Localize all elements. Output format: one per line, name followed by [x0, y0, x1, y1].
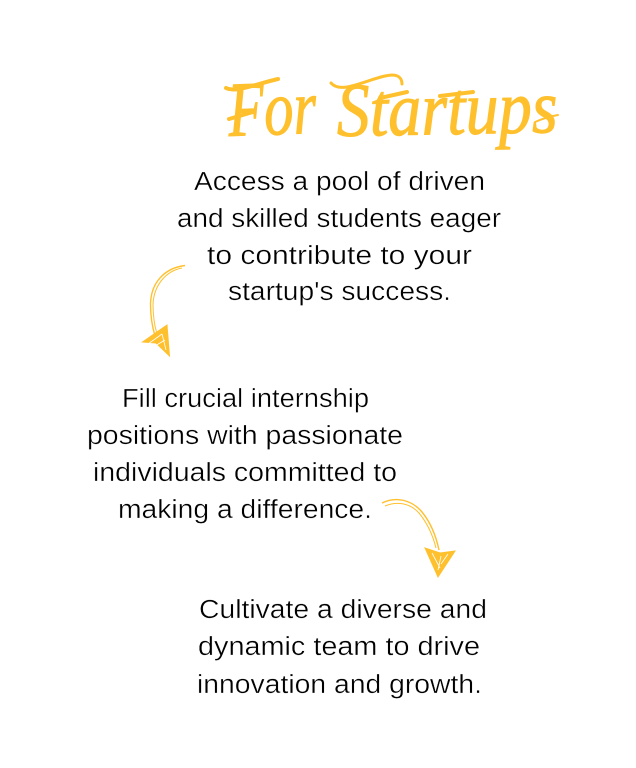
text block: diverse team: [197, 596, 487, 699]
text block: internship positions: [87, 385, 403, 524]
text block: internship positions: making a difference.: [118, 496, 372, 524]
text block: diverse team: dynamic team to drive: [198, 633, 480, 661]
title brush flourishes: [226, 75, 558, 122]
text block: internship positions: Fill crucial internship: [122, 385, 369, 413]
title: Startups: [336, 65, 558, 153]
title: [226, 63, 558, 153]
arrow: curved down-right: [382, 500, 455, 577]
text block: access students: Access a pool of driven: [194, 168, 485, 196]
text block: access students: [177, 168, 502, 306]
arrow: curved down-left: [142, 266, 185, 356]
text block: access students: to contribute to your: [207, 242, 473, 270]
title: For: [226, 63, 318, 153]
text block: diverse team: innovation and growth.: [197, 671, 482, 699]
text block: access students: and skilled students eager: [177, 205, 502, 233]
text block: access students: startup's success.: [228, 278, 451, 306]
text block: internship positions: positions with passionate: [87, 422, 403, 450]
text block: internship positions: individuals committed to: [93, 459, 397, 487]
text block: diverse team: Cultivate a diverse and: [199, 596, 487, 624]
